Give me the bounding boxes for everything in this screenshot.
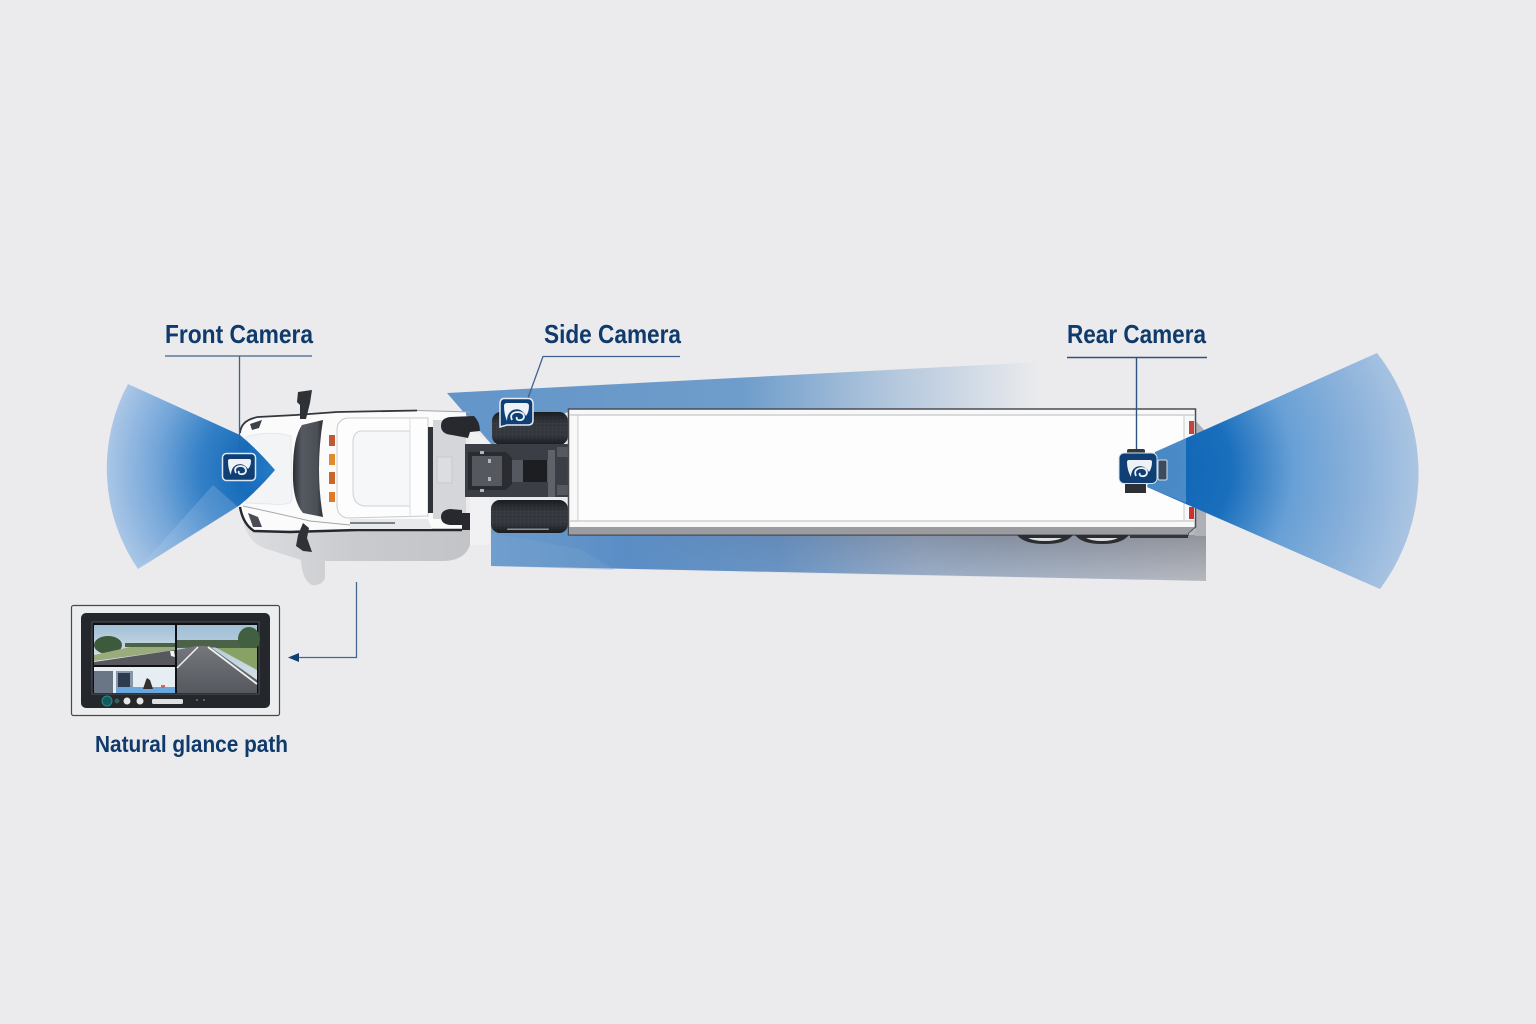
trailer top seam	[569, 414, 1195, 416]
frame	[465, 444, 568, 497]
trailer lower seam	[569, 520, 1195, 522]
trailer lower side band	[569, 527, 1195, 534]
side camera coverage: upper beam	[447, 362, 1040, 445]
frame crossmember	[548, 450, 555, 497]
view: top left	[94, 625, 175, 665]
camera badge	[1119, 453, 1157, 484]
rear tail light top	[1189, 421, 1194, 434]
lower cab outline	[240, 507, 462, 532]
rear camera coverage cone	[1147, 353, 1419, 589]
monitor outer frame	[72, 606, 280, 716]
rear tail light bottom	[1189, 507, 1194, 519]
cab body	[240, 411, 466, 532]
monitor	[72, 606, 280, 716]
tractor cab	[240, 410, 480, 532]
leader line: side camera	[528, 356, 680, 398]
view: bottom left	[94, 667, 175, 693]
label: natural glance path: Natural glance path	[95, 731, 288, 757]
windshield	[293, 420, 323, 517]
trailer	[568, 409, 1196, 538]
plate bolts	[480, 451, 491, 492]
fifth wheel plate	[468, 452, 512, 490]
lower tire	[491, 500, 568, 533]
monitor controls	[102, 696, 205, 706]
trailer roof panel	[578, 415, 1184, 521]
lower mirror	[296, 523, 312, 552]
trailer bottom rail	[1130, 535, 1188, 538]
view: right road	[177, 625, 260, 693]
upper frame end	[557, 447, 568, 457]
front cone lower facet	[138, 485, 238, 569]
upper cab tail outline	[417, 410, 470, 412]
cab shadow	[243, 520, 470, 585]
cab rear edge	[428, 427, 433, 513]
camera swirl	[1135, 468, 1147, 476]
trailer body	[568, 409, 1196, 535]
centre well	[523, 460, 547, 482]
lower frame end	[557, 485, 568, 495]
lower fender	[441, 509, 470, 530]
lower beam facet	[491, 533, 615, 570]
light gap behind cab	[470, 428, 490, 545]
plate top	[472, 456, 502, 486]
roof fairing	[353, 431, 410, 506]
upper tire	[492, 412, 568, 445]
arrow: glance path	[288, 582, 356, 662]
camera side housing	[1158, 460, 1167, 480]
upper headlight	[250, 420, 262, 430]
label: front camera: Front Camera	[165, 319, 313, 349]
side strip accent	[350, 522, 395, 524]
icon: side camera	[500, 398, 533, 427]
trailer rear shadow	[1195, 420, 1206, 536]
rear deck	[433, 420, 466, 519]
camera top cap	[1127, 449, 1145, 454]
front camera coverage cone	[107, 384, 275, 569]
leader line: front camera	[165, 356, 312, 453]
label: rear camera: Rear Camera	[1067, 319, 1206, 349]
chassis	[465, 444, 568, 497]
monitor body	[81, 613, 270, 708]
icon: rear camera	[1119, 449, 1167, 493]
leader line: rear camera	[1067, 358, 1207, 452]
trailer rear wheels	[1017, 535, 1129, 544]
side camera coverage: lower beam	[491, 520, 1206, 581]
lower hood crease	[243, 506, 350, 525]
upper fender	[441, 416, 480, 438]
label: side camera: Side Camera	[544, 319, 681, 349]
upper cab outline	[240, 410, 417, 433]
upper mirror	[297, 390, 312, 419]
lower headlight	[248, 513, 262, 527]
roof	[337, 418, 428, 518]
camera lower bracket	[1125, 484, 1146, 493]
monitor screen	[92, 622, 259, 694]
camera glyph	[1127, 460, 1152, 477]
trailer under shadow	[700, 535, 1206, 572]
icon: front camera	[222, 454, 256, 480]
frame shadow block	[512, 460, 548, 482]
roof seam	[409, 419, 411, 517]
deck plate	[437, 457, 452, 483]
rear cone section over trailer	[1147, 438, 1186, 503]
lower side strip	[350, 519, 432, 529]
cab marker lights	[329, 435, 335, 502]
hood panel	[246, 433, 292, 504]
